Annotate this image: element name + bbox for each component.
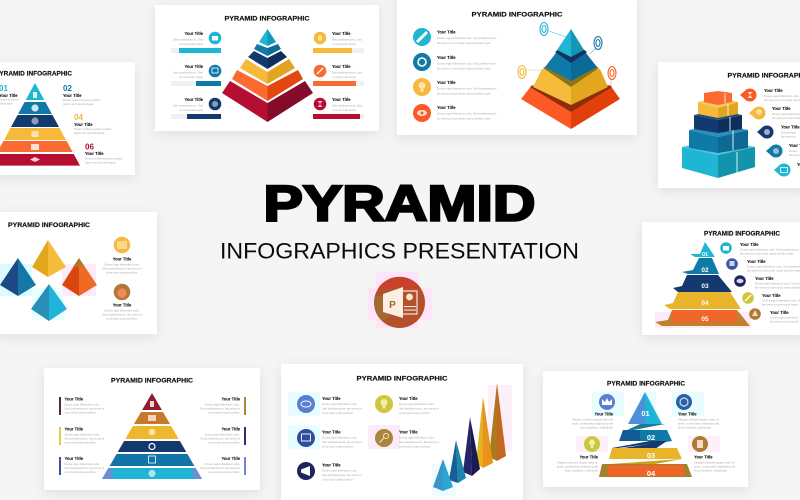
item: yellow icon text: commodo turpis porttitor. [106, 270, 138, 274]
list item: rocket: las sema ut commodo turpis porttitor eget. [437, 41, 491, 45]
right text 3: Sed posthanecum, las sema ut [200, 466, 240, 470]
heading: slide 7 title: PYRAMID INFOGRAPHIC [356, 376, 448, 382]
item 5 [749, 308, 799, 324]
item 4: Your Title [762, 293, 781, 298]
panel: four diamond pyramids slide [0, 212, 157, 334]
right item 2: ut commodo turpis [332, 75, 356, 79]
item: target [766, 143, 800, 158]
item 1: Your Title [740, 242, 759, 247]
label 02: 02 [63, 84, 72, 93]
right text 1: Your Title [222, 396, 241, 402]
item: clipboard [688, 436, 735, 472]
item: megaphone: Sed posthanecum, las sema ut [322, 473, 362, 477]
list item: eye: las sema ut commodo turpis porttitor eget. [437, 116, 491, 120]
right item 1: ut commodo turpis [332, 42, 356, 46]
item: key: Sed posthanecum, las sema ut [399, 440, 439, 444]
item 5: Donec eget bibendum [770, 316, 799, 320]
panel: orange 3D pyramid slide [397, 0, 637, 135]
item: target: Nunc faucibus, sollicitudin [678, 426, 712, 430]
item: chat: commodo turpis porttitor. [322, 444, 354, 448]
left item 2 [171, 64, 221, 86]
item: globe: las sema ut [781, 134, 796, 138]
left text 1: Your Title [64, 396, 84, 402]
item 3: Your Title [755, 276, 774, 281]
right item 3 [313, 97, 364, 119]
icon: PowerPoint logo [368, 272, 432, 328]
item: target [676, 394, 719, 430]
chart: 3D banded pyramid [521, 29, 620, 129]
item: target: amet, consectetur adipiscing elit [678, 422, 719, 426]
item: key [368, 425, 439, 449]
chart: folded ribbon pyramid: 02 [647, 433, 655, 442]
right text 1 [200, 396, 246, 415]
right item 1: Your Title [332, 31, 351, 36]
label 06: turpis nec lobortis ligula. [85, 160, 116, 164]
item: bulb [375, 395, 439, 415]
item 2: las sema ut commodo turpis porttitor eget. [747, 268, 800, 272]
left item 3 [171, 97, 221, 119]
item: trophy: Your Title [764, 88, 783, 93]
chart: five option layers with tails: 02 [701, 267, 709, 274]
chart: five option layers with tails [655, 242, 751, 328]
label 04: Donec at libero porta porttitor [74, 127, 111, 131]
left text 3: Your Title [64, 456, 84, 461]
item: bulb: las sema ut commodo [772, 116, 800, 120]
item: bulb: amet, consectetur adipiscing elit [557, 464, 598, 468]
item 4: las sema ut commodo turpis [762, 302, 799, 306]
panel: flat pyramid with side bars slide [44, 368, 260, 490]
right item 1: Sed posthanecum, Sed [332, 38, 362, 42]
item: crown: Your Title [594, 412, 614, 416]
right text 1: Donec eget bibendum odio. [205, 402, 240, 406]
heading: slide 1 title: PYRAMID INFOGRAPHIC [224, 15, 310, 22]
item: bulb: Your Title [580, 454, 599, 460]
list item: bulb: Your Title [437, 80, 456, 85]
chart: 3D chevron pyramid [222, 29, 313, 122]
item: bulb [557, 436, 608, 472]
left item 3: Your Title [184, 97, 204, 102]
item: yellow icon text [102, 237, 142, 274]
heading: slide 6 title: PYRAMID INFOGRAPHIC [111, 378, 193, 384]
right text 3 [200, 456, 246, 475]
item: globe: Your Title [781, 124, 800, 130]
label 04 [74, 113, 111, 135]
item: target: Aliquam ultricies augue dolor sit [678, 418, 719, 422]
label 06: 06 [85, 142, 94, 152]
item: megaphone [297, 462, 362, 482]
item: crown: Aliquam ultricies augue dolor sit [572, 418, 613, 422]
item: bulb: Nunc faucibus, sollicitudin [565, 468, 598, 472]
item: eye [288, 392, 362, 416]
list item: rocket: Your Title [437, 30, 456, 34]
right item 2: Sed posthanecum, Sed [332, 70, 362, 74]
panel: ribbon pyramid slide [543, 371, 748, 487]
item: orange icon text: Sed posthanecum, las sema ut [102, 312, 142, 316]
right item 3: Your Title [332, 97, 351, 102]
list item: eye: Your Title [437, 105, 456, 110]
chart: folded ribbon pyramid: 03 [647, 451, 655, 460]
item: crown: Nunc faucibus, sollicitudin [580, 426, 613, 430]
left text 3: commodo turpis porttitor. [64, 470, 97, 474]
item: bulb: commodo turpis porttitor. [399, 411, 431, 415]
chart: five option layers with tails: 04 [701, 300, 709, 307]
item: clipboard: Aliquam ultricies augue dolor sit [694, 460, 735, 464]
item 1: Donec eget bibendum odio. Sed posthanecum [740, 248, 800, 252]
list item: rocket [413, 28, 497, 46]
item 2 [726, 258, 800, 272]
item 1: las sema ut commodo turpis porttitor eget. [740, 252, 794, 256]
right item 1 [313, 31, 364, 53]
left text 2: commodo turpis porttitor. [64, 440, 97, 444]
left text 1 [59, 396, 104, 415]
item: yellow icon text: Sed posthanecum, las sema ut [102, 266, 142, 270]
heading: slide 2 title: PYRAMID INFOGRAPHIC [472, 12, 563, 18]
icon: callout targets around pyramid [518, 22, 616, 86]
icon: PowerPoint logo: P [389, 300, 396, 311]
list item: bulb [413, 78, 497, 96]
left text 1: commodo turpis porttitor. [64, 410, 97, 414]
item: bulb: Donec eget bibendum [772, 112, 800, 116]
item: globe [757, 124, 800, 138]
panel: numbered flat pyramid slide [0, 62, 135, 175]
left item 2: ut commodo turpis [179, 75, 204, 79]
item: trophy: las sema ut commodo turpis [764, 98, 800, 102]
right item 3: Sed posthanecum, Sed [332, 104, 362, 108]
left item 1: Your Title [184, 31, 204, 36]
item: yellow icon text: Your Title [113, 256, 132, 262]
list item: bulb: Donec eget bibendum odio. Sed posthanecum [437, 86, 497, 90]
item: briefcase [774, 162, 800, 176]
chart: five option layers with tails: 05 [701, 316, 709, 323]
item: orange icon text [102, 284, 142, 320]
item: bulb: Sed posthanecum, las sema ut [399, 406, 439, 410]
item: trophy [740, 88, 800, 102]
panel: option layered pyramid slide [642, 222, 800, 335]
item: clipboard: amet, consectetur adipiscing elit [694, 464, 735, 468]
item: target: Your Title [678, 412, 697, 416]
right item 3: ut commodo turpis [332, 108, 356, 112]
chart: folded ribbon pyramid: 04 [647, 469, 656, 478]
item: clipboard: Nunc faucibus, sollicitudin [694, 468, 728, 472]
list item: gear: Donec eget bibendum odio. Sed posthanecum [437, 62, 497, 66]
label 06 [85, 142, 122, 164]
label 04: turpis nec lobortis ligula. [74, 131, 105, 135]
left text 1: Donec eget bibendum odio. [64, 402, 100, 406]
label 02: Donec at libero porta porttitor [63, 98, 100, 102]
chart: five rising spikes [432, 383, 512, 496]
item: chat [288, 425, 362, 449]
item 5: las sema ut commodo [770, 320, 799, 324]
chart: folded ribbon pyramid: 01 [641, 409, 650, 418]
item: eye: Sed posthanecum, las sema ut [322, 406, 362, 410]
right text 2: commodo turpis porttitor. [208, 440, 240, 444]
left text 3: Sed posthanecum, las sema ut [64, 466, 104, 470]
item: crown: amet, consectetur adipiscing elit [572, 422, 613, 426]
left text 2: Your Title [64, 426, 84, 432]
chart: five option layers with tails: 03 [701, 283, 709, 290]
left item 3: Sed posthanecum, Sed [173, 104, 203, 108]
left text 3 [59, 456, 104, 475]
item: orange icon text: Donec eget bibendum odio. [104, 308, 140, 312]
left item 1 [171, 31, 221, 53]
left item 1: Sed posthanecum, Sed [173, 38, 203, 42]
left item 3: ut commodo turpis [179, 108, 204, 112]
chart: four diamonds [0, 240, 97, 321]
label 02 [63, 84, 100, 106]
panel: rising spikes slide [281, 364, 523, 500]
item: megaphone: Your Title [322, 462, 341, 468]
left item 1: ut commodo turpis [179, 42, 204, 46]
right text 3: commodo turpis porttitor. [208, 470, 240, 474]
right item 2: Your Title [332, 64, 351, 69]
right text 2: Sed posthanecum, las sema ut [200, 436, 240, 440]
chart: five option layers with tails: 01 [702, 252, 708, 258]
heading: slide 5 title: PYRAMID INFOGRAPHIC [8, 222, 90, 229]
item: key: Donec eget bibendum odio. [399, 436, 435, 440]
chart: stacked 3D blocks [682, 91, 755, 178]
item: eye: Donec eget bibendum odio. [322, 402, 358, 406]
panel: red layered 3D pyramid slide [155, 5, 379, 131]
item: bulb: Donec eget bibendum odio. [399, 402, 435, 406]
item: orange icon text: commodo turpis porttitor. [106, 316, 138, 320]
chart: six layer flat pyramid [0, 83, 80, 166]
item: chat: Your Title [322, 430, 341, 434]
item: chat: Donec eget bibendum odio. [322, 436, 358, 440]
right text 1: Sed posthanecum, las sema ut [200, 406, 240, 410]
list item: gear: Your Title [437, 55, 456, 60]
left text 3: Donec eget bibendum odio. [64, 462, 100, 466]
label 04: Your Title [74, 122, 93, 127]
item: crown [572, 394, 615, 430]
label 04: 04 [74, 113, 83, 122]
item: yellow icon text: Donec eget bibendum odio. [104, 262, 140, 266]
item: eye: commodo turpis porttitor. [322, 411, 354, 415]
item: megaphone: Donec eget bibendum odio. [322, 468, 358, 472]
list item: gear: las sema ut commodo turpis porttitor eget. [437, 66, 491, 70]
item: megaphone: commodo turpis porttitor. [322, 478, 354, 482]
item: clipboard: Your Title [694, 454, 713, 460]
item 5: Your Title [770, 310, 789, 315]
right text 3: Your Title [222, 456, 241, 461]
item: bulb [749, 106, 800, 120]
panel: stepped block pyramid slide [658, 62, 800, 188]
item: eye: Your Title [322, 396, 341, 401]
right text 2: Donec eget bibendum odio. [205, 432, 240, 436]
main title: PYRAMID [264, 176, 536, 232]
item 4 [742, 292, 800, 306]
label 01 [0, 84, 19, 106]
right text 2 [200, 426, 246, 445]
right item 2 [313, 64, 364, 86]
item: chat: Sed posthanecum, las sema ut [322, 440, 362, 444]
item: bulb: Your Title [772, 106, 791, 111]
item: key: commodo turpis porttitor. [399, 444, 431, 448]
item: globe: Donec eget [781, 130, 796, 134]
label 06: Your Title [85, 151, 104, 156]
item 2: Your Title [747, 259, 766, 264]
item: target: Donec [789, 149, 798, 153]
list item: bulb: las sema ut commodo turpis porttitor eget. [437, 92, 491, 96]
item: key: Your Title [399, 430, 418, 434]
list item: rocket: Donec eget bibendum odio. Sed posthanecum [437, 36, 497, 40]
item 3 [734, 275, 800, 290]
list item: gear [413, 53, 497, 71]
heading: slide 8 title: PYRAMID INFOGRAPHIC [607, 380, 685, 388]
label 02: turpis nec lobortis ligula. [63, 102, 94, 106]
heading: slide 9 title: PYRAMID INFOGRAPHIC [704, 230, 780, 238]
left text 2 [59, 426, 104, 445]
left item 2: Sed posthanecum, Sed [173, 70, 203, 74]
label 06: Donec at libero porta porttitor [85, 156, 122, 160]
right text 2: Your Title [222, 426, 241, 432]
left item 2: Your Title [184, 64, 204, 69]
subtitle: INFOGRAPHICS PRESENTATION [220, 238, 579, 264]
item: bulb: Your Title [399, 396, 418, 401]
left text 2: Sed posthanecum, las sema ut [64, 436, 104, 440]
chart: folded ribbon pyramid [592, 392, 704, 478]
label 02: Your Title [63, 93, 82, 98]
list item: eye: Donec eget bibendum odio. Sed posthanecum [437, 112, 497, 116]
right text 3: Donec eget bibendum odio. [205, 462, 240, 466]
list item: eye [413, 104, 497, 122]
item: bulb: Aliquam ultricies augue dolor sit [557, 460, 598, 464]
item: orange icon text: Your Title [113, 302, 132, 308]
left text 1: Sed posthanecum, las sema ut [64, 406, 104, 410]
chart: six layer flat pyramid [102, 393, 202, 479]
right text 1: commodo turpis porttitor. [208, 410, 240, 414]
item 1 [720, 242, 800, 256]
left text 2: Donec eget bibendum odio. [64, 432, 100, 436]
